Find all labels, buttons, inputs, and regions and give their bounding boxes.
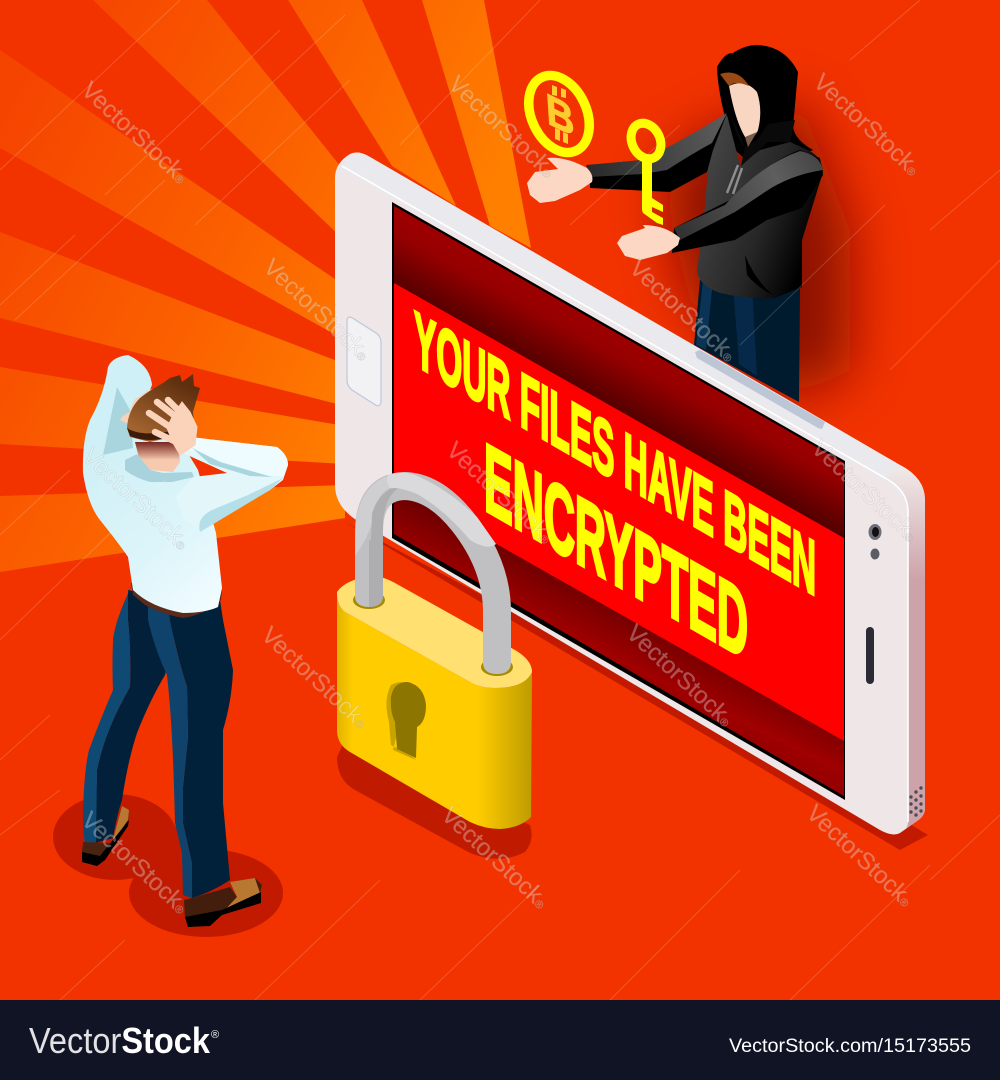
front shoe — [184, 878, 262, 927]
watermark repeats: VectorStock® — [801, 800, 919, 912]
right side panel — [885, 465, 925, 831]
phone body — [335, 153, 925, 834]
shackle sockets — [353, 591, 513, 676]
top bevel — [341, 153, 918, 500]
watermark repeats: VectorStock® — [624, 255, 742, 367]
back leg — [83, 585, 178, 843]
hand on head — [149, 400, 197, 455]
registered mark: ® — [211, 1029, 219, 1041]
sunburst rays — [0, 0, 531, 572]
foot shadows — [53, 794, 283, 937]
shirt torso and raised arm — [83, 355, 222, 613]
lock body top — [337, 576, 532, 688]
golden key — [625, 118, 667, 225]
shackle — [355, 472, 497, 662]
earpiece — [695, 350, 825, 429]
shackle top highlight — [387, 472, 496, 547]
hair — [127, 374, 200, 442]
watermark repeats: VectorStock® — [808, 69, 926, 181]
phone ground shadow — [345, 522, 928, 850]
shackle inner shade — [370, 487, 400, 590]
watermark repeats: VectorStock® — [77, 443, 195, 555]
hacker neck — [745, 132, 757, 147]
arm inner shade — [103, 387, 133, 455]
bitcoin coin — [517, 66, 601, 162]
key ring — [625, 118, 667, 164]
watermark repeats: VectorStock® — [258, 254, 376, 366]
front camera — [868, 524, 882, 560]
hood inner and collar — [730, 113, 795, 166]
back of hand on head — [120, 388, 176, 425]
lower dark band — [394, 486, 844, 794]
red message band — [394, 283, 844, 741]
watermark repeats: VectorStock® — [76, 807, 194, 919]
upper open hand — [527, 158, 592, 203]
face — [729, 83, 760, 138]
watermark repeats — [76, 69, 926, 919]
watermark repeats: VectorStock® — [256, 622, 374, 734]
key stem and teeth — [642, 160, 663, 225]
hair band shadow — [127, 428, 172, 440]
speaker grille — [909, 786, 923, 817]
watermark repeats: VectorStock® — [441, 437, 559, 549]
back shoe — [82, 806, 129, 866]
hoodie pocket — [745, 255, 773, 295]
padlock shadow — [337, 740, 532, 859]
left arm — [586, 113, 727, 192]
hoodie drawstrings — [727, 165, 742, 194]
footer image id: VectorStock.com/15173555 — [729, 1036, 971, 1057]
front leg — [148, 600, 233, 898]
shocked man — [82, 355, 288, 927]
lower open hand — [617, 225, 680, 260]
watermark repeats: VectorStock® — [436, 802, 554, 914]
hacker jeans — [694, 280, 800, 402]
home button — [347, 317, 381, 406]
watermark repeats: VectorStock® — [443, 71, 561, 183]
right arm — [672, 150, 823, 253]
screen — [392, 202, 845, 800]
shackle left highlight — [355, 476, 390, 556]
keyhole — [386, 682, 426, 760]
hacker figure — [527, 45, 823, 402]
hoodie body — [697, 115, 823, 298]
upper dark band — [394, 206, 844, 540]
watermark repeats: VectorStock® — [76, 77, 194, 189]
lock body front — [337, 592, 532, 829]
watermark repeats: VectorStock® — [806, 435, 924, 547]
shackle legs — [355, 540, 511, 674]
hood — [717, 45, 813, 172]
neck — [135, 442, 180, 472]
trouser belt — [131, 583, 222, 618]
side slot — [866, 627, 874, 684]
back leg stripe — [83, 585, 132, 843]
hair fringe — [720, 72, 749, 86]
footer logo: VectorStock — [29, 1020, 211, 1061]
footer bar — [0, 1000, 1000, 1080]
right arm — [176, 437, 288, 532]
shirt collar — [125, 454, 194, 482]
hacker glow shadow — [665, 100, 850, 400]
padlock — [337, 472, 532, 859]
phone edge highlight — [342, 166, 908, 822]
smartphone — [335, 153, 925, 834]
bitcoin symbol: B — [544, 84, 576, 147]
watermark repeats: VectorStock® — [621, 620, 739, 732]
front leg stripe — [148, 605, 192, 898]
